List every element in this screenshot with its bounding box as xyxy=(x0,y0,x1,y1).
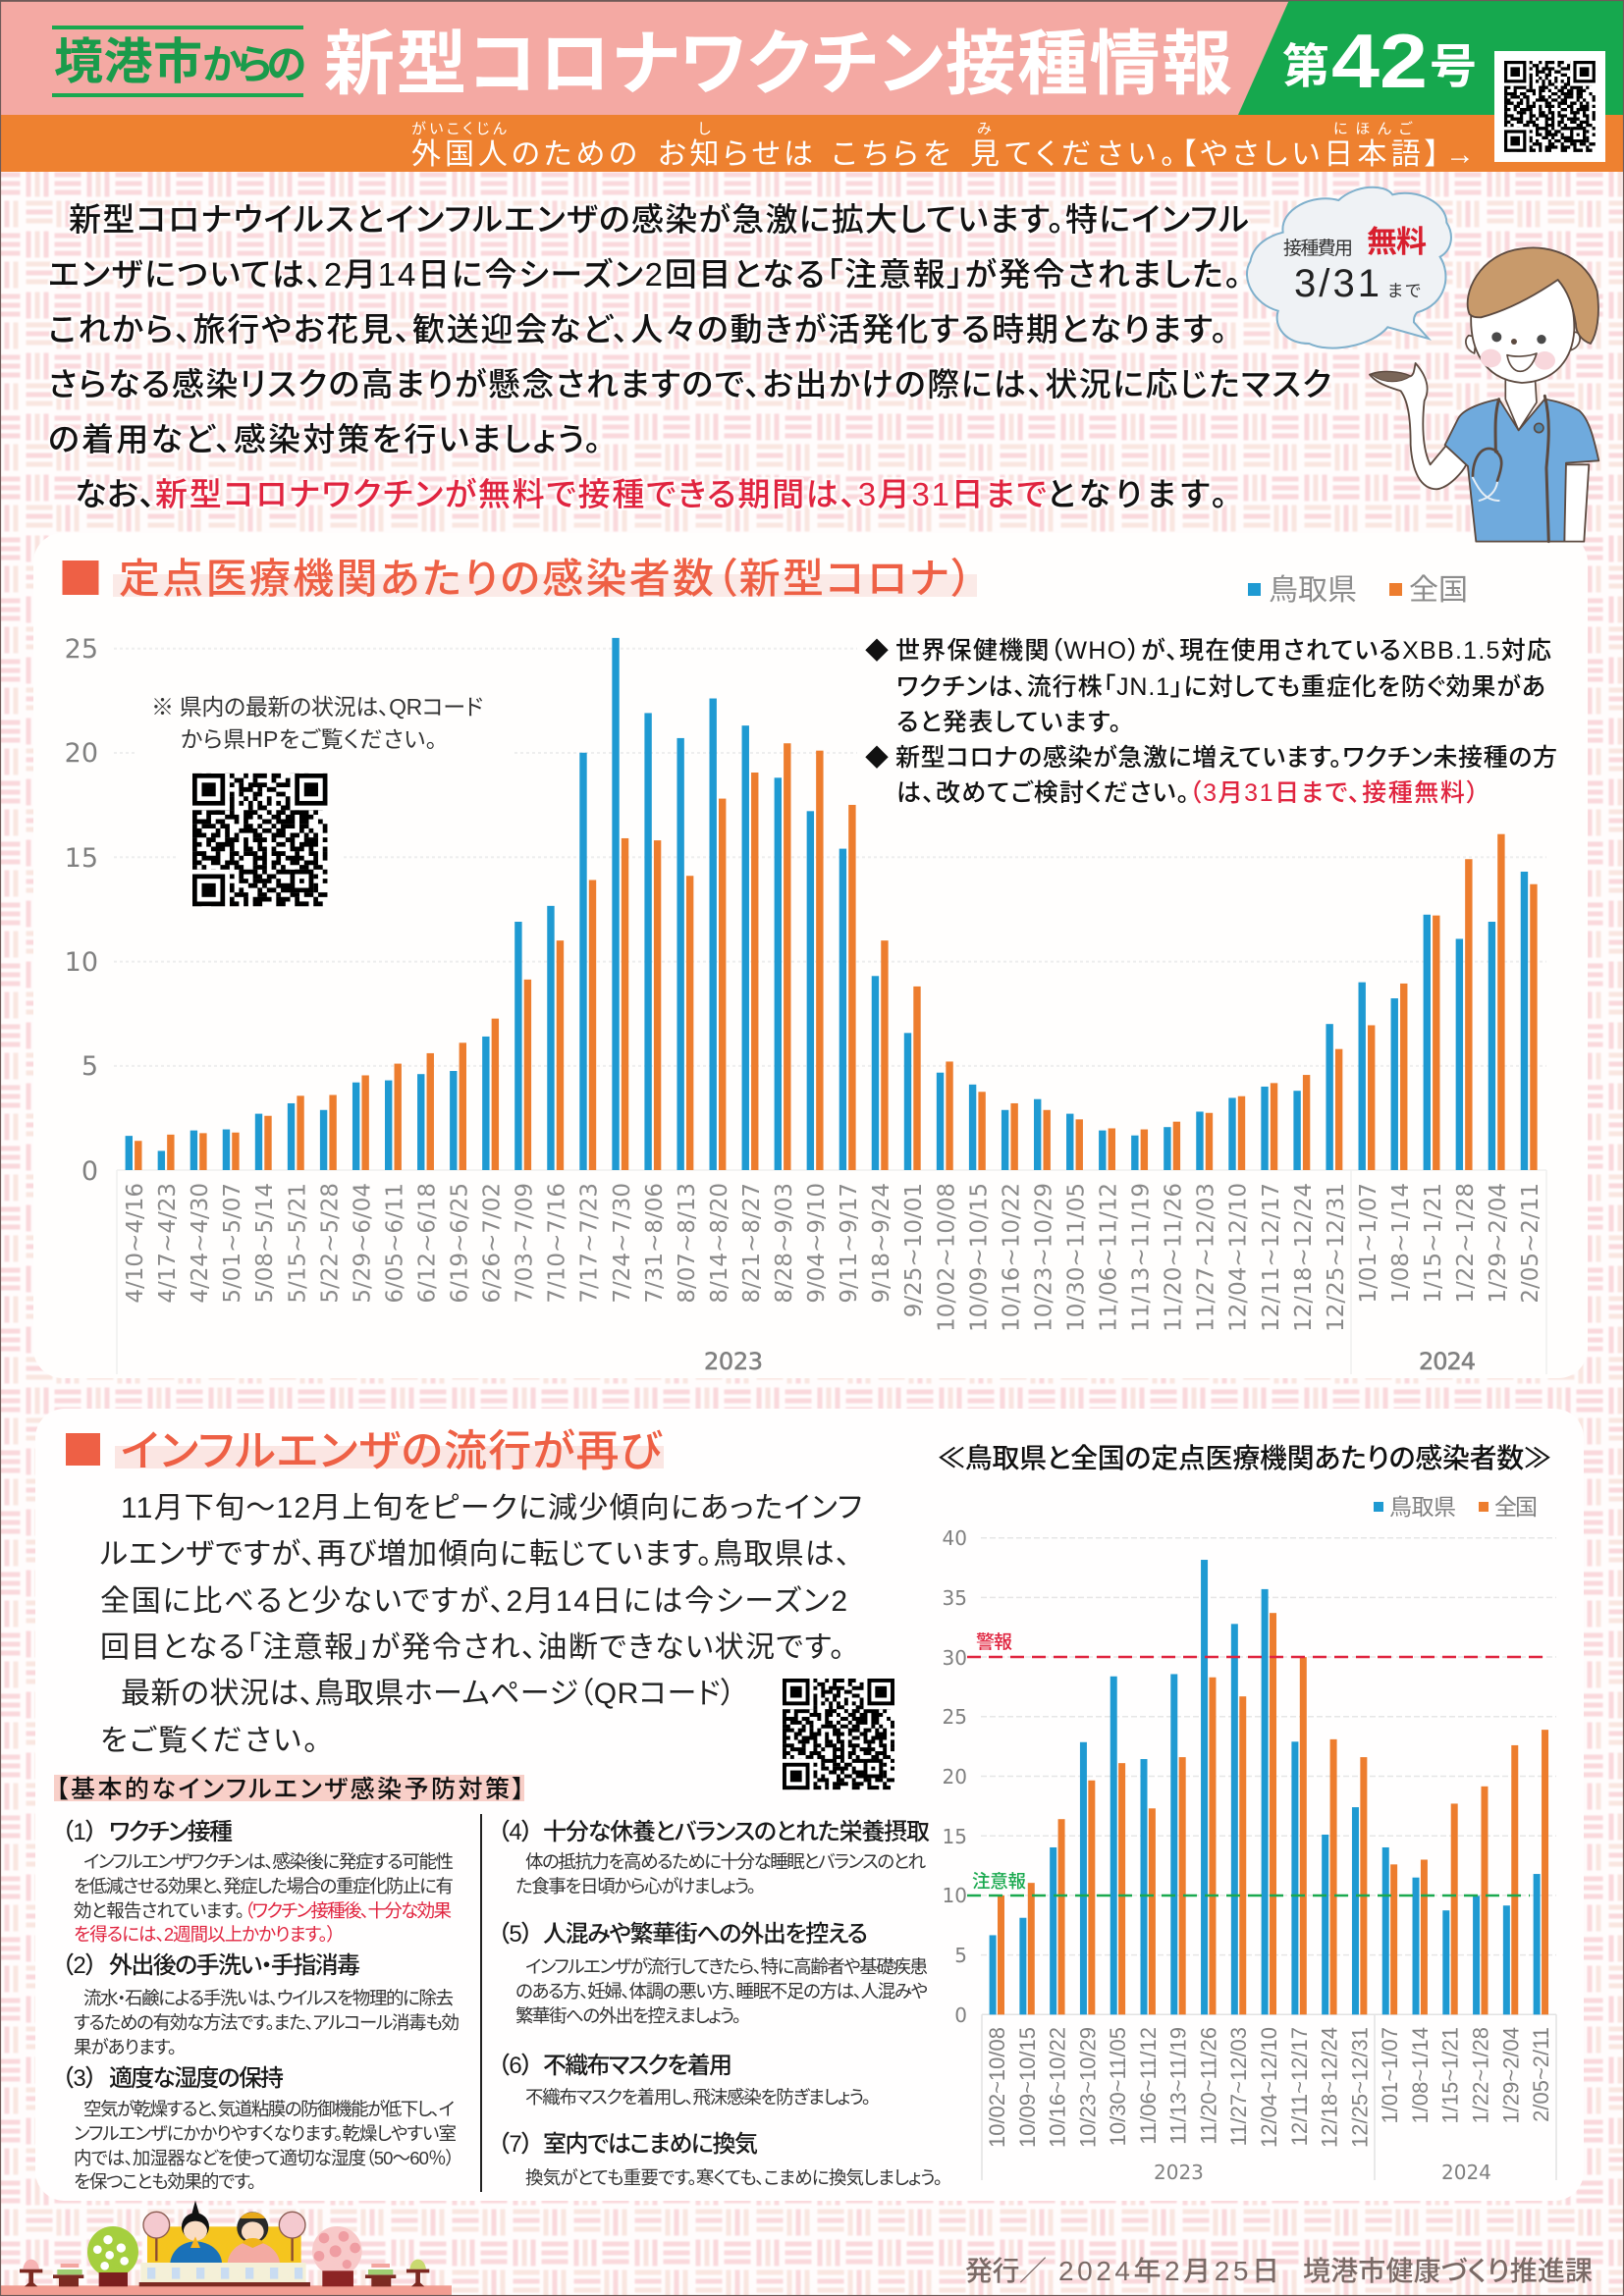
speech bubble: 3/31 xyxy=(1294,262,1380,305)
x axis labels: covid: 12/18~12/24 xyxy=(1291,1183,1317,1332)
prevention 2: hand washing: （2） xyxy=(62,1952,97,1979)
prevention 3: humidity: 適度な湿度の保持 xyxy=(109,2065,284,2092)
intro text: さらなる感染リスクの高まりが懸念されますので、お出かけの際には、状況に応じたマスク xyxy=(48,366,1331,402)
x axis labels: covid: 7/31~8/06 xyxy=(642,1183,668,1304)
header band xyxy=(0,0,1624,115)
prevention 5: avoid crowds: 人混みや繁華街への外出を控える xyxy=(543,1921,868,1948)
orange notice bar: お知らせは xyxy=(658,138,813,171)
x axis labels: covid: 7/10~7/16 xyxy=(545,1183,570,1304)
chart title: influenza: ≪鳥取県と全国の定点医療機関あたりの感染者数≫ xyxy=(938,1443,1551,1473)
prevention 2: hand washing: するための有効な方法です。また、アルコール消毒も効 xyxy=(74,2012,460,2033)
prevention 6: masks: 不織布マスクを着用し、飛沫感染を防ぎましょう。 xyxy=(525,2087,871,2108)
y axis labels: covid: 5 xyxy=(81,1051,98,1082)
issue number tab: 第 xyxy=(1282,41,1329,93)
panel: covid chart xyxy=(33,533,1588,1378)
intro text: 新型コロナワクチンが無料で接種できる期間は、3月31日まで xyxy=(155,476,1047,512)
prevention 6: masks: 不織布マスクを着用 xyxy=(543,2053,732,2079)
x axis labels: influenza: 11/27~12/03 xyxy=(1226,2027,1251,2146)
orange notice bar: こちらを xyxy=(832,138,950,171)
x axis labels: covid: 5/01~5/07 xyxy=(220,1183,245,1304)
x axis labels: covid: 5/22~5/28 xyxy=(317,1183,343,1304)
influenza body text: をご覧ください。 xyxy=(100,1725,318,1757)
alert line: advisory: 注意報 xyxy=(972,1871,1026,1892)
x axis labels: influenza: 10/16~10/22 xyxy=(1046,2027,1070,2148)
prevention 5: avoid crowds: 繁華街への外出を控えましょう。 xyxy=(515,2005,741,2026)
prevention 4: rest and nutrition: 体の抵抗力を高めるために十分な睡眠とバランスのとれ xyxy=(525,1851,926,1872)
x axis labels: covid: 6/12~6/18 xyxy=(414,1183,440,1304)
QR code: prefecture covid page xyxy=(192,774,327,906)
prevention 7: ventilation: 室内ではこまめに換気 xyxy=(543,2131,758,2158)
x axis labels: covid: 9/11~9/17 xyxy=(837,1183,862,1304)
prevention 3: humidity: ンフルエンザにかかりやすくなります。乾燥しやすい室 xyxy=(74,2123,457,2144)
x axis labels: influenza: 10/02~10/08 xyxy=(985,2027,1009,2148)
x axis labels: covid: 11/06~11/12 xyxy=(1096,1183,1121,1332)
publisher tag: 境港市 xyxy=(54,34,202,89)
publisher tag: からの xyxy=(202,42,306,87)
prevention 3: humidity: 内では、加湿器などを使って適切な湿度（50～60％） xyxy=(74,2148,455,2168)
prevention 2: hand washing: 果があります。 xyxy=(74,2037,177,2057)
issue number tab: 42 xyxy=(1331,18,1428,104)
intro text: の着用など、感染対策を行いましょう。 xyxy=(48,421,601,457)
x axis labels: covid: 7/03~7/09 xyxy=(513,1183,538,1304)
x axis labels: covid: 10/23~10/29 xyxy=(1031,1183,1056,1332)
intro text: となります。 xyxy=(1047,476,1227,512)
y axis labels: influenza: 35 xyxy=(943,1586,967,1610)
prevention 7: ventilation: （7） xyxy=(498,2131,533,2158)
intro text: エンザについては、2月14日に今シーズン2回目となる「注意報」が発令されました。 xyxy=(48,256,1241,293)
x axis labels: covid: 9/25~10/01 xyxy=(901,1183,927,1317)
note: latest status xyxy=(151,694,483,752)
WHO bullet text: 新型コロナの感染が急激に増えています。ワクチン未接種の方 xyxy=(895,744,1557,772)
panel: influenza xyxy=(35,1409,1584,2201)
x axis labels: covid: 6/05~6/11 xyxy=(382,1183,407,1304)
y axis labels: influenza: 0 xyxy=(954,2003,967,2027)
x axis labels: covid: 12/11~12/17 xyxy=(1259,1183,1284,1332)
influenza body text: 全国に比べると少ないですが、2月14日には今シーズン2 xyxy=(100,1585,847,1618)
year labels: influenza: 2023 xyxy=(1154,2161,1204,2184)
x axis labels: influenza: 12/18~12/24 xyxy=(1318,2027,1342,2148)
x axis labels: covid: 11/13~11/19 xyxy=(1129,1183,1155,1332)
x axis labels: influenza: 1/01~1/07 xyxy=(1378,2027,1402,2123)
x axis labels: covid: 10/09~10/15 xyxy=(966,1183,992,1332)
x axis labels: covid: 9/18~9/24 xyxy=(869,1183,894,1304)
y axis labels: covid xyxy=(65,634,98,1187)
prevention 3: humidity: （3） xyxy=(62,2065,97,2092)
publisher tag xyxy=(52,26,306,97)
QR code: prefecture influenza page xyxy=(783,1679,894,1789)
QR code: top xyxy=(1494,51,1605,162)
y axis labels: covid: 20 xyxy=(65,738,98,769)
title: 新型コロナワクチン接種情報 xyxy=(324,26,1232,104)
legend: covid: 鳥取県 xyxy=(1269,574,1357,607)
illustration: nurse xyxy=(1370,247,1598,542)
heading: influenza: インフルエンザの流行が再び xyxy=(121,1427,664,1475)
influenza body text: 回目となる「注意報」が発令され、油断できない状況です。 xyxy=(100,1631,844,1664)
x axis labels: covid: 8/07~8/13 xyxy=(675,1183,700,1304)
legend: influenza xyxy=(1374,1494,1538,1520)
prevention 2: hand washing xyxy=(62,1952,460,2057)
legend: covid xyxy=(1248,574,1468,607)
x axis labels: influenza: 1/15~1/21 xyxy=(1438,2027,1463,2123)
prevention 2: hand washing: 流水・石鹸による手洗いは、ウイルスを物理的に除去 xyxy=(83,1988,454,2008)
prevention 4: rest and nutrition: 十分な休養とバランスのとれた栄養摂取 xyxy=(543,1819,930,1845)
prevention 1: vaccination: を低減させる効果と、発症した場合の重症化防止に有 xyxy=(74,1876,454,1896)
orange notice bar: 外国人のための xyxy=(411,138,637,171)
year labels: influenza: 2024 xyxy=(1441,2161,1491,2184)
y axis labels: influenza: 25 xyxy=(943,1705,967,1729)
orange notice bar: し xyxy=(698,121,711,137)
influenza body text: ルエンザですが、再び増加傾向に転じています。鳥取県は、 xyxy=(100,1538,850,1571)
y axis labels: influenza: 30 xyxy=(943,1646,967,1670)
prevention 4: rest and nutrition: （4） xyxy=(498,1819,533,1845)
intro text xyxy=(48,201,1331,512)
prevention 1: vaccination: （1） xyxy=(62,1819,97,1845)
x axis labels: covid: 10/02~10/08 xyxy=(934,1183,959,1332)
x axis labels: covid: 4/10~4/16 xyxy=(123,1183,148,1304)
x axis labels: covid: 12/25~12/31 xyxy=(1324,1183,1349,1332)
prevention 3: humidity: 空気が乾燥すると、気道粘膜の防御機能が低下し、イ xyxy=(83,2099,455,2119)
prevention 1: vaccination: 効と報告されています。 xyxy=(74,1900,244,1921)
x axis labels: covid: 6/19~6/25 xyxy=(448,1183,473,1304)
prevention 4: rest and nutrition xyxy=(498,1819,930,1896)
x axis labels: covid: 5/15~5/21 xyxy=(285,1183,310,1304)
bars: national covid xyxy=(135,743,1538,1170)
orange notice bar: み xyxy=(977,121,992,137)
x axis labels: influenza: 10/30~11/05 xyxy=(1106,2027,1130,2146)
influenza body text: 11月下旬～12月上旬をピークに減少傾向にあったインフ xyxy=(121,1492,862,1524)
y axis labels: influenza xyxy=(943,1526,967,2027)
prevention 3: humidity: を保つことも効果的です。 xyxy=(74,2171,256,2192)
WHO bullet text xyxy=(865,637,1557,807)
prevention subheading: 【基本的なインフルエンザ感染予防対策】 xyxy=(56,1776,524,1803)
footer publisher line: 2024年2月25日 xyxy=(1058,2256,1279,2286)
orange notice bar: にほんご xyxy=(1333,121,1413,137)
x axis labels: influenza: 11/06~11/12 xyxy=(1136,2027,1161,2145)
WHO bullet text: ◆ xyxy=(865,638,889,665)
x axis labels: covid: 7/17~7/23 xyxy=(577,1183,603,1304)
influenza body text xyxy=(100,1492,862,1757)
prevention 6: masks: （6） xyxy=(498,2053,533,2079)
footer publisher line: 境港市健康づくり推進課 xyxy=(1303,2256,1593,2286)
x axis labels: covid: 9/04~9/10 xyxy=(804,1183,830,1304)
x axis labels: covid: 4/24~4/30 xyxy=(188,1183,213,1304)
x axis labels: covid: 6/26~7/02 xyxy=(480,1183,506,1304)
x axis labels: influenza: 10/09~10/15 xyxy=(1015,2027,1040,2148)
y axis labels: influenza: 40 xyxy=(943,1526,967,1550)
prevention 7: ventilation: 換気がとても重要です。寒くても、こまめに換気しましょう。 xyxy=(525,2167,943,2188)
x axis labels: influenza: 12/04~12/10 xyxy=(1257,2027,1281,2148)
prevention 4: rest and nutrition: た食事を日頃から心がけましょう。 xyxy=(515,1876,756,1896)
x axis labels: covid: 8/14~8/20 xyxy=(707,1183,732,1304)
speech bubble: 無料 xyxy=(1367,225,1427,259)
x axis labels: covid: 1/29~2/04 xyxy=(1486,1183,1511,1304)
prevention 5: avoid crowds: （5） xyxy=(498,1921,533,1948)
WHO bullet text: ◆ xyxy=(865,745,889,772)
orange notice bar xyxy=(0,115,1624,172)
x axis labels: influenza: 1/08~1/14 xyxy=(1408,2027,1433,2123)
WHO bullet text: （3月31日まで、接種無料） xyxy=(1189,779,1479,807)
x axis labels: covid: 11/20~11/26 xyxy=(1162,1183,1187,1332)
y axis labels: influenza: 15 xyxy=(943,1825,967,1848)
speech bubble: まで xyxy=(1387,282,1421,300)
x axis labels: covid: 8/28~9/03 xyxy=(772,1183,797,1304)
prevention 5: avoid crowds: インフルエンザが流行してきたら、特に高齢者や基礎疾患 xyxy=(525,1956,928,1977)
year labels: covid xyxy=(704,1348,1476,1375)
x axis labels: covid: 10/16~10/22 xyxy=(999,1183,1024,1332)
year labels: influenza xyxy=(1154,2161,1491,2184)
y axis labels: covid: 0 xyxy=(81,1156,98,1187)
x axis labels: influenza xyxy=(985,2027,1553,2148)
prevention 1: vaccination: インフルエンザワクチンは、感染後に発症する可能性 xyxy=(83,1851,454,1872)
prevention 1: vaccination: を得るには、2週間以上かかります。） xyxy=(74,1924,336,1945)
y axis labels: influenza: 10 xyxy=(943,1884,967,1907)
prevention 5: avoid crowds: のある方、妊婦、体調の悪い方、睡眠不足の方は、人混みや xyxy=(515,1981,928,2002)
x axis labels: covid: 12/04~12/10 xyxy=(1226,1183,1252,1332)
prevention 1: vaccination: ワクチン接種 xyxy=(109,1819,233,1845)
speech bubble: 接種費用 xyxy=(1283,238,1353,259)
prevention 3: humidity xyxy=(62,2065,457,2192)
note: latest status: から県HPをご覧ください。 xyxy=(181,726,437,752)
note: latest status: ※ 県内の最新の状況は、QRコード xyxy=(151,694,483,720)
prevention 1: vaccination xyxy=(62,1819,454,1945)
year labels: covid: 2023 xyxy=(704,1348,763,1375)
x axis labels: covid: 1/01~1/07 xyxy=(1356,1183,1381,1304)
intro text: これから、旅行やお花見、歓送迎会など、人々の動きが活発化する時期となります。 xyxy=(48,311,1227,347)
bars: Tottori covid xyxy=(126,638,1528,1170)
influenza body text: 最新の状況は、鳥取県ホームページ（QRコード） xyxy=(121,1678,735,1710)
prevention 1: vaccination: （ワクチン接種後、十分な効果 xyxy=(244,1900,452,1921)
x axis labels: covid: 1/15~1/21 xyxy=(1421,1183,1446,1304)
x axis labels: influenza: 10/23~10/29 xyxy=(1075,2027,1100,2148)
x axis labels: covid: 1/22~1/28 xyxy=(1453,1183,1479,1304)
intro text: なお、 xyxy=(75,476,155,512)
WHO bullet text: は、改めてご検討ください。 xyxy=(896,779,1189,807)
issue number tab xyxy=(1238,0,1624,115)
orange notice bar: → xyxy=(1445,138,1475,171)
x axis labels: covid: 4/17~4/23 xyxy=(155,1183,181,1304)
WHO bullet text: 世界保健機関（WHO）が、現在使用されているXBB.1.5対応 xyxy=(895,637,1551,665)
x axis labels: influenza: 1/22~1/28 xyxy=(1468,2027,1492,2123)
speech bubble xyxy=(1247,187,1451,348)
prevention 5: avoid crowds xyxy=(498,1921,928,2026)
orange notice bar: がいこくじん xyxy=(411,121,508,137)
x axis labels: influenza: 2/05~2/11 xyxy=(1529,2027,1553,2122)
x axis labels: covid: 2/05~2/11 xyxy=(1518,1183,1543,1304)
legend: influenza: 全国 xyxy=(1494,1494,1538,1520)
WHO bullet text: ると発表しています。 xyxy=(896,709,1121,736)
x axis labels: influenza: 11/13~11/19 xyxy=(1166,2027,1191,2145)
issue number tab: 号 xyxy=(1430,41,1477,93)
y axis labels: covid: 25 xyxy=(65,634,98,665)
y axis labels: influenza: 5 xyxy=(954,1944,967,1967)
orange notice bar: 【やさしい日本語】 xyxy=(1181,138,1439,171)
y axis labels: covid: 10 xyxy=(65,947,98,978)
x axis labels: covid: 7/24~7/30 xyxy=(610,1183,635,1304)
y axis labels: influenza: 20 xyxy=(943,1765,967,1789)
legend: influenza: 鳥取県 xyxy=(1389,1494,1456,1520)
footer publisher line: 発行／ xyxy=(965,2256,1047,2286)
orange notice bar: 見てください。 xyxy=(970,138,1175,171)
year labels: covid: 2024 xyxy=(1419,1348,1476,1375)
WHO bullet text: ワクチンは、流行株「JN.1」に対しても重症化を防ぐ効果があ xyxy=(896,673,1545,701)
x axis labels: influenza: 12/25~12/31 xyxy=(1347,2027,1372,2148)
heading: covid: 定点医療機関あたりの感染者数（新型コロナ） xyxy=(119,556,972,602)
footer publisher line xyxy=(965,2256,1593,2286)
x axis labels: covid: 8/21~8/27 xyxy=(739,1183,765,1304)
x axis labels: influenza: 12/11~12/17 xyxy=(1287,2027,1312,2146)
x axis labels: covid: 1/08~1/14 xyxy=(1388,1183,1414,1304)
bars: national influenza xyxy=(998,1613,1548,2014)
intro text: 新型コロナウイルスとインフルエンザの感染が急激に拡大しています。特にインフル xyxy=(69,201,1249,238)
x axis labels: covid xyxy=(123,1183,1543,1332)
prevention 7: ventilation xyxy=(498,2131,943,2188)
bars: Tottori influenza xyxy=(990,1560,1541,2014)
x axis labels: covid: 5/29~6/04 xyxy=(350,1183,375,1304)
x axis labels: covid: 5/08~5/14 xyxy=(252,1183,278,1304)
illustration: hina dolls xyxy=(0,2201,452,2295)
x axis labels: influenza: 11/20~11/26 xyxy=(1196,2027,1220,2145)
y axis labels: covid: 15 xyxy=(65,843,98,874)
x axis labels: influenza: 1/29~2/04 xyxy=(1498,2027,1523,2123)
x axis labels: covid: 10/30~11/05 xyxy=(1063,1183,1089,1332)
prevention 6: masks xyxy=(498,2053,871,2108)
alert line: warning: 警報 xyxy=(976,1631,1012,1653)
x axis labels: covid: 11/27~12/03 xyxy=(1194,1183,1219,1332)
prevention 2: hand washing: 外出後の手洗い・手指消毒 xyxy=(109,1952,360,1979)
legend: covid: 全国 xyxy=(1409,574,1468,607)
